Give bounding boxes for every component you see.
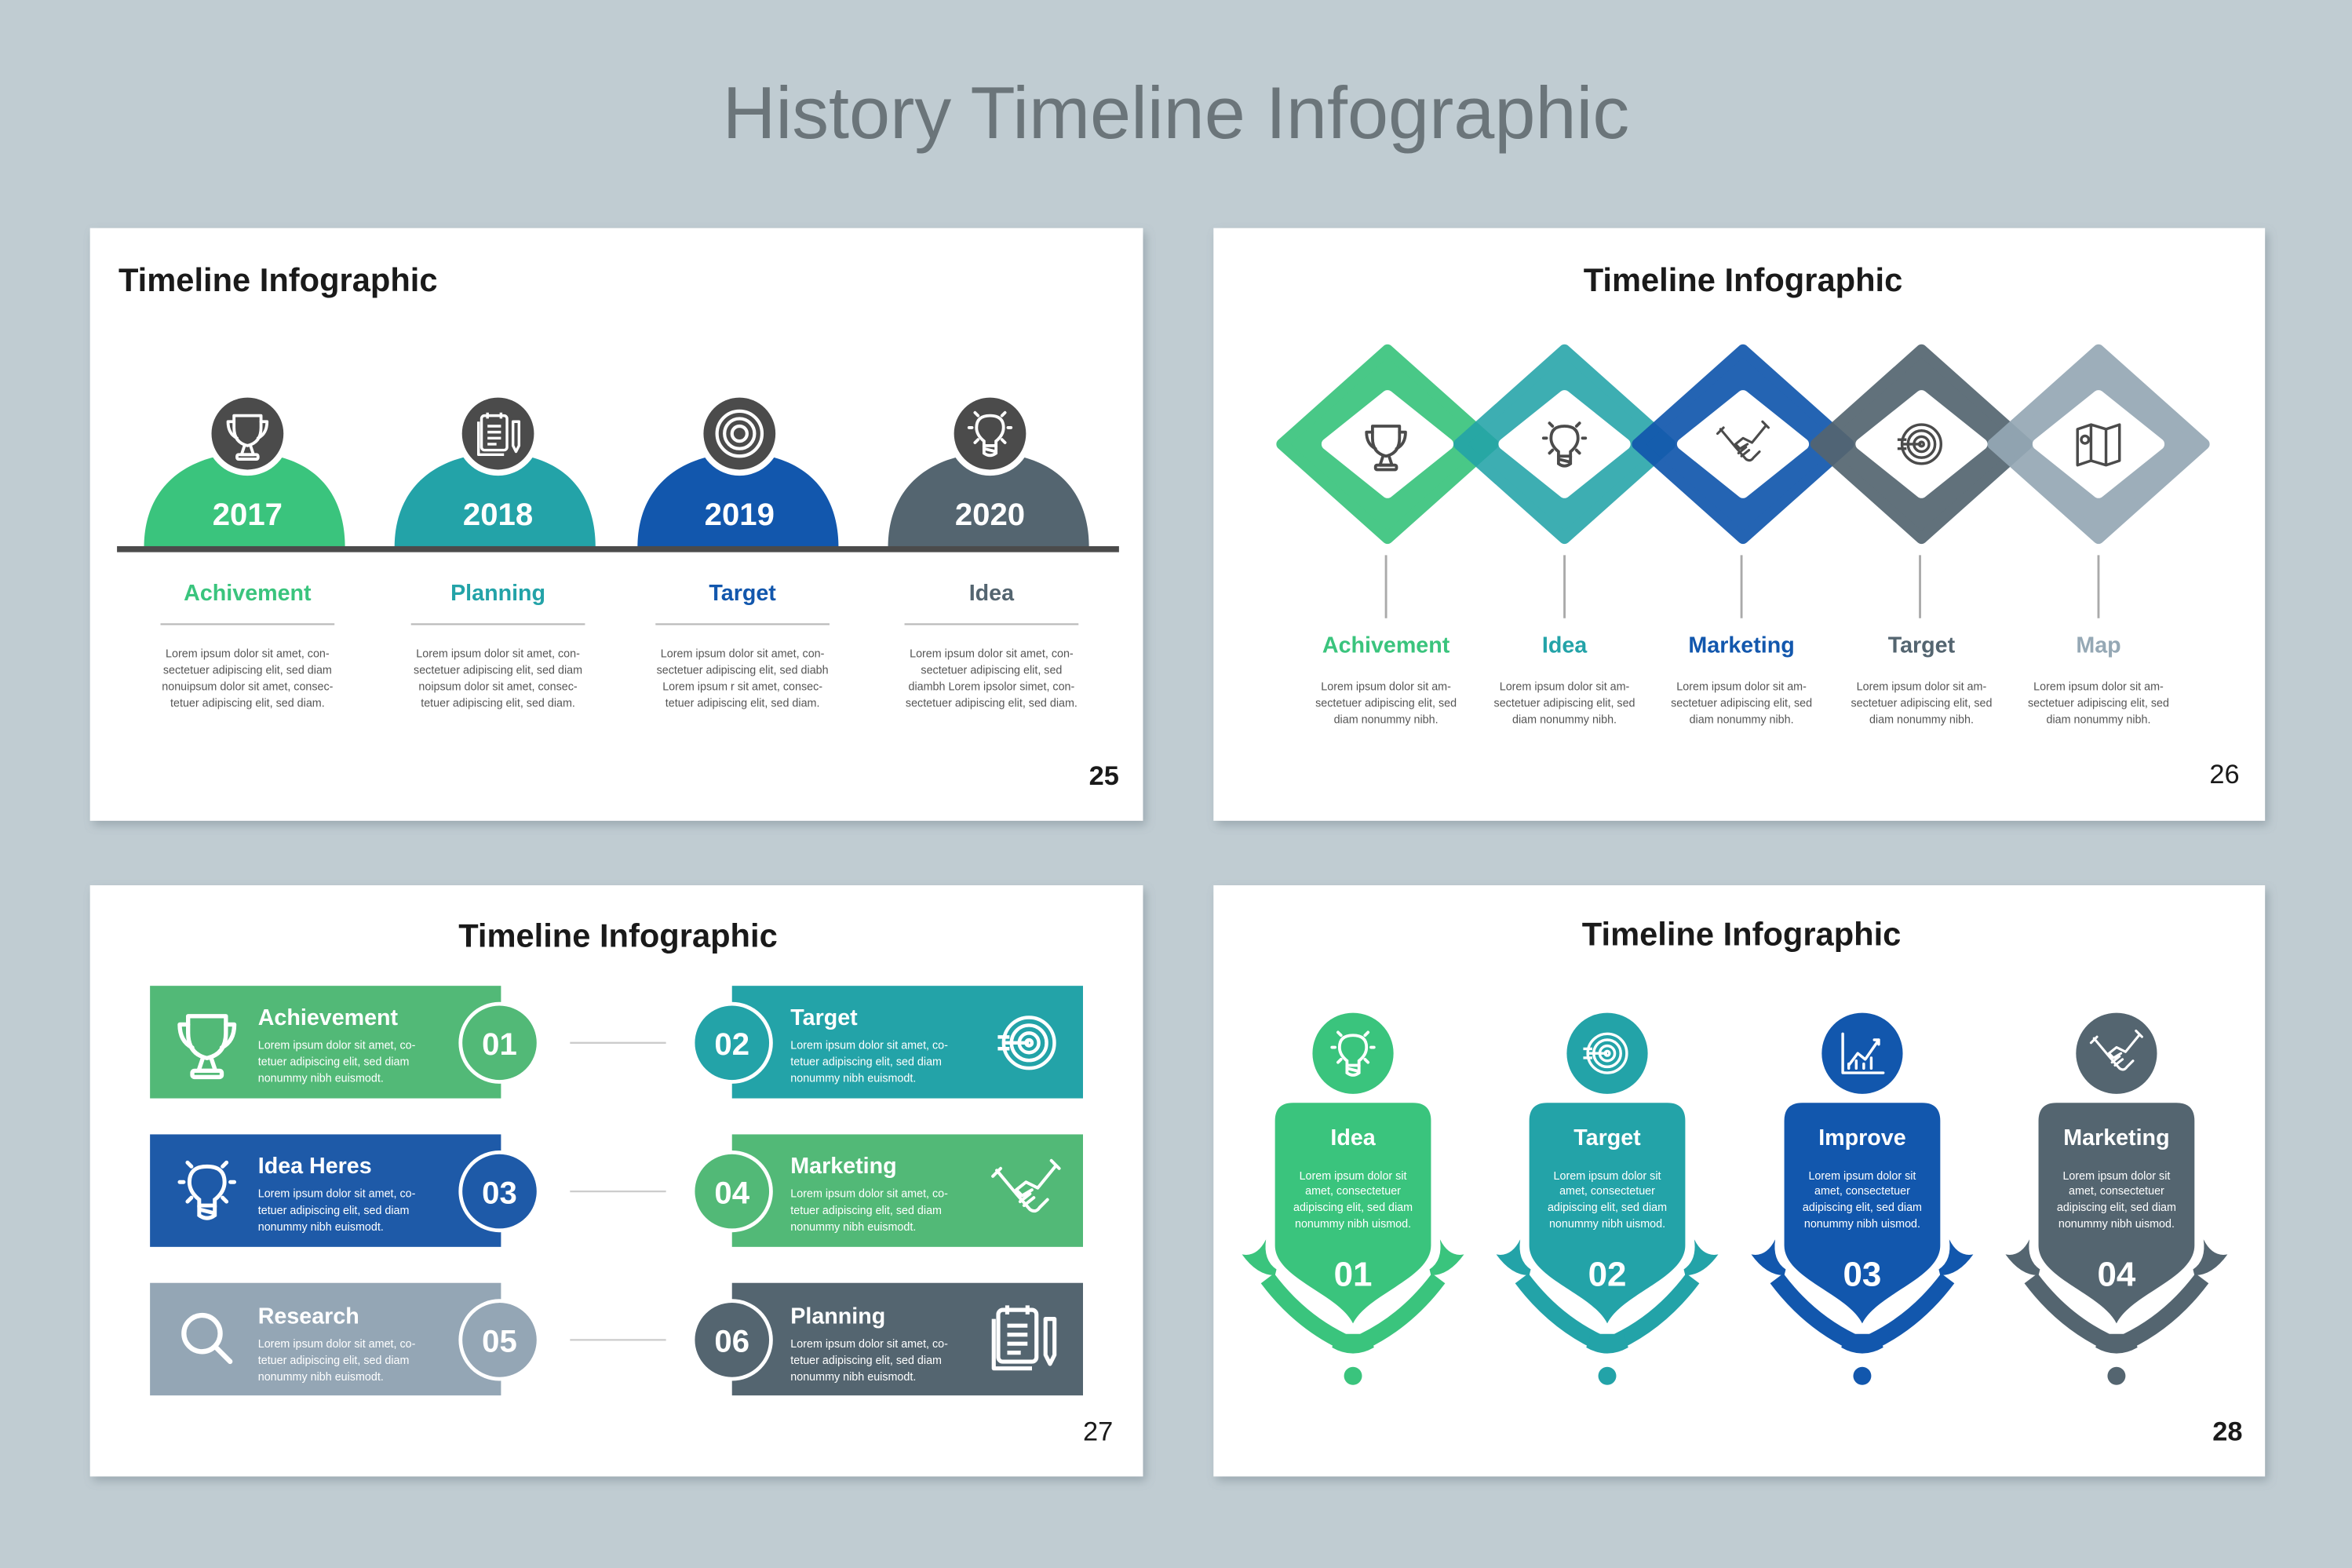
shield 01 idea: Lorem ipsum dolor sit xyxy=(1300,1170,1407,1183)
timeline item 2018: Planning xyxy=(450,581,545,606)
page number 26: 26 xyxy=(2209,760,2240,789)
diamond icons xyxy=(1366,421,2120,469)
box 04 marketing: nonummy nibh euismodt. xyxy=(790,1221,916,1234)
labels 26 xyxy=(1315,633,2169,727)
connector lines 27 xyxy=(570,1043,666,1340)
box 01 achievement: Lorem ipsum dolor sit amet, co- xyxy=(258,1039,416,1052)
shield 01 idea: nonummy nibh uismod. xyxy=(1295,1218,1411,1231)
box 03 idea xyxy=(150,1134,538,1247)
labels 26: Lorem ipsum dolor sit am- xyxy=(1676,681,1807,694)
box 02 target: nonummy nibh euismodt. xyxy=(790,1073,916,1085)
shield 03 improve: Lorem ipsum dolor sit xyxy=(1808,1170,1916,1183)
timeline item 2020: 2020 xyxy=(955,497,1025,532)
box 01 achievement xyxy=(150,986,538,1099)
labels 26: Map xyxy=(2076,633,2121,658)
shield 04 marketing: adipiscing elit, sed diam xyxy=(2057,1202,2176,1214)
labels 26: Marketing xyxy=(1688,633,1795,658)
shield 02 target: adipiscing elit, sed diam xyxy=(1548,1202,1667,1214)
labels 26: diam nonummy nibh. xyxy=(1334,714,1439,727)
labels 26: Lorem ipsum dolor sit am- xyxy=(1500,681,1630,694)
timeline item 2020: diambh Lorem ipsolor simet, con- xyxy=(909,681,1075,694)
shield 02 target: amet, consectetuer xyxy=(1559,1185,1655,1198)
page number 25: 25 xyxy=(1089,761,1119,791)
shield 04 marketing: nonummy nibh uismod. xyxy=(2058,1218,2175,1231)
shield 03 improve: nonummy nibh uismod. xyxy=(1804,1218,1920,1231)
timeline item 2017: tetuer adipiscing elit, sed diam. xyxy=(170,698,325,710)
heading 26: Timeline Infographic xyxy=(1584,261,1902,298)
timeline item 2019: tetuer adipiscing elit, sed diam. xyxy=(665,698,819,710)
panel: slide 27 xyxy=(90,885,1143,1476)
box 05 research: Research xyxy=(258,1304,359,1329)
timeline item 2019: Lorem ipsum r sit amet, consec- xyxy=(662,681,822,694)
box 02 target xyxy=(693,986,1083,1099)
timeline item 2018 xyxy=(395,392,596,710)
box 05 research: tetuer adipiscing elit, sed diam xyxy=(258,1355,409,1367)
labels 26: sectetuer adipiscing elit, sed xyxy=(1851,698,1992,710)
timeline item 2017: nonuipsum dolor sit amet, consec- xyxy=(162,681,334,694)
shield 01 idea: adipiscing elit, sed diam xyxy=(1293,1202,1413,1214)
shield 03 improve: 03 xyxy=(1843,1256,1881,1294)
box 03 idea: nonummy nibh euismodt. xyxy=(258,1221,384,1234)
shield 02 target: 02 xyxy=(1588,1256,1626,1294)
timeline item 2019: Target xyxy=(709,581,776,606)
heading 25: Timeline Infographic xyxy=(119,261,438,298)
shield 03 improve: Improve xyxy=(1818,1125,1906,1150)
box 02 target: tetuer adipiscing elit, sed diam xyxy=(790,1056,942,1068)
box 02 target: Lorem ipsum dolor sit amet, co- xyxy=(790,1039,948,1052)
box 01 achievement: Achievement xyxy=(258,1005,399,1030)
shield 02 target xyxy=(1497,1013,1718,1385)
box 06 planning: Planning xyxy=(790,1304,885,1329)
box 06 planning: 06 xyxy=(714,1324,749,1359)
main title: History Timeline Infographic xyxy=(723,71,1629,154)
timeline item 2020: Idea xyxy=(969,581,1015,606)
box 02 target: 02 xyxy=(714,1026,749,1062)
box 06 planning: tetuer adipiscing elit, sed diam xyxy=(790,1355,942,1367)
connector lines xyxy=(1386,555,2099,618)
heading 27: Timeline Infographic xyxy=(458,917,778,954)
box 06 planning: Lorem ipsum dolor sit amet, co- xyxy=(790,1338,948,1351)
heading 28: Timeline Infographic xyxy=(1582,916,1901,953)
box 02 target: Target xyxy=(790,1005,858,1030)
labels 26: Lorem ipsum dolor sit am- xyxy=(1857,681,1986,694)
labels 26: Achivement xyxy=(1322,633,1450,658)
labels 26: Lorem ipsum dolor sit am- xyxy=(1321,681,1451,694)
shield 03 improve xyxy=(1752,1013,1973,1385)
labels 26: Lorem ipsum dolor sit am- xyxy=(2033,681,2164,694)
box 04 marketing xyxy=(693,1134,1083,1247)
box 06 planning: nonummy nibh euismodt. xyxy=(790,1371,916,1384)
box 01 achievement: nonummy nibh euismodt. xyxy=(258,1073,384,1085)
panel: slide 28 xyxy=(1213,885,2265,1476)
shield 02 target: nonummy nibh uismod. xyxy=(1549,1218,1665,1231)
box 05 research: Lorem ipsum dolor sit amet, co- xyxy=(258,1338,416,1351)
box 01 achievement: 01 xyxy=(482,1026,517,1062)
labels 26: Target xyxy=(1888,633,1956,658)
shield 01 idea: 01 xyxy=(1334,1256,1372,1294)
timeline item 2018: noipsum dolor sit amet, consec- xyxy=(418,681,578,694)
timeline baseline xyxy=(117,546,1119,552)
labels 26: Idea xyxy=(1542,633,1588,658)
timeline item 2018: tetuer adipiscing elit, sed diam. xyxy=(421,698,575,710)
shield 04 marketing: 04 xyxy=(2097,1256,2136,1294)
shield 02 target: Target xyxy=(1573,1125,1641,1150)
box 01 achievement: tetuer adipiscing elit, sed diam xyxy=(258,1056,409,1068)
shield 01 idea xyxy=(1242,1013,1464,1385)
panel: slide 25 xyxy=(90,228,1143,821)
box 05 research xyxy=(150,1283,538,1395)
diamond chain xyxy=(1282,350,2204,538)
labels 26: sectetuer adipiscing elit, sed xyxy=(2028,698,2169,710)
shield 01 idea: amet, consectetuer xyxy=(1305,1185,1401,1198)
shield 02 target: Lorem ipsum dolor sit xyxy=(1554,1170,1661,1183)
timeline item 2019: 2019 xyxy=(705,497,775,532)
labels 26: sectetuer adipiscing elit, sed xyxy=(1315,698,1457,710)
timeline item 2018: 2018 xyxy=(463,497,533,532)
shield 04 marketing xyxy=(2005,1013,2227,1385)
timeline item 2018: sectetuer adipiscing elit, sed diam xyxy=(414,664,582,676)
labels 26: sectetuer adipiscing elit, sed xyxy=(1494,698,1635,710)
box 05 research: 05 xyxy=(482,1324,517,1359)
timeline item 2017: Achivement xyxy=(184,581,312,606)
panel: slide 26 xyxy=(1213,228,2265,821)
box 04 marketing: tetuer adipiscing elit, sed diam xyxy=(790,1205,942,1217)
timeline item 2020: sectetuer adipiscing elit, sed diam. xyxy=(906,698,1078,710)
labels 26: diam nonummy nibh. xyxy=(1690,714,1794,727)
timeline item 2017: sectetuer adipiscing elit, sed diam xyxy=(163,664,332,676)
timeline item 2020: Lorem ipsum dolor sit amet, con- xyxy=(910,647,1074,660)
box 03 idea: Lorem ipsum dolor sit amet, co- xyxy=(258,1188,416,1201)
box 04 marketing: 04 xyxy=(714,1175,750,1210)
shield 03 improve: adipiscing elit, sed diam xyxy=(1803,1202,1922,1214)
shield 04 marketing: amet, consectetuer xyxy=(2069,1185,2164,1198)
page number 28: 28 xyxy=(2212,1417,2242,1446)
timeline item 2019 xyxy=(637,392,838,710)
timeline item 2020 xyxy=(888,392,1089,710)
shield 04 marketing: Marketing xyxy=(2063,1125,2170,1150)
shield 03 improve: amet, consectetuer xyxy=(1814,1185,1910,1198)
timeline item 2017: Lorem ipsum dolor sit amet, con- xyxy=(166,647,330,660)
timeline item 2017: 2017 xyxy=(213,497,283,532)
shield 04 marketing: Lorem ipsum dolor sit xyxy=(2062,1170,2170,1183)
box 04 marketing: Lorem ipsum dolor sit amet, co- xyxy=(790,1188,948,1201)
shield 01 idea: Idea xyxy=(1330,1125,1377,1150)
box 04 marketing: Marketing xyxy=(790,1154,897,1179)
page number 27: 27 xyxy=(1083,1417,1113,1446)
timeline item 2019: Lorem ipsum dolor sit amet, con- xyxy=(661,647,825,660)
box 06 planning xyxy=(693,1283,1083,1395)
timeline item 2017 xyxy=(144,392,345,710)
box 03 idea: 03 xyxy=(482,1175,517,1210)
labels 26: diam nonummy nibh. xyxy=(1512,714,1617,727)
labels 26: sectetuer adipiscing elit, sed xyxy=(1671,698,1812,710)
box 05 research: nonummy nibh euismodt. xyxy=(258,1371,384,1384)
labels 26: diam nonummy nibh. xyxy=(1869,714,1974,727)
box 03 idea: tetuer adipiscing elit, sed diam xyxy=(258,1205,409,1217)
timeline item 2019: sectetuer adipiscing elit, sed diabh xyxy=(657,664,829,676)
timeline item 2018: Lorem ipsum dolor sit amet, con- xyxy=(416,647,580,660)
box 03 idea: Idea Heres xyxy=(258,1154,372,1179)
timeline item 2020: sectetuer adipiscing elit, sed xyxy=(921,664,1062,676)
labels 26: diam nonummy nibh. xyxy=(2046,714,2150,727)
